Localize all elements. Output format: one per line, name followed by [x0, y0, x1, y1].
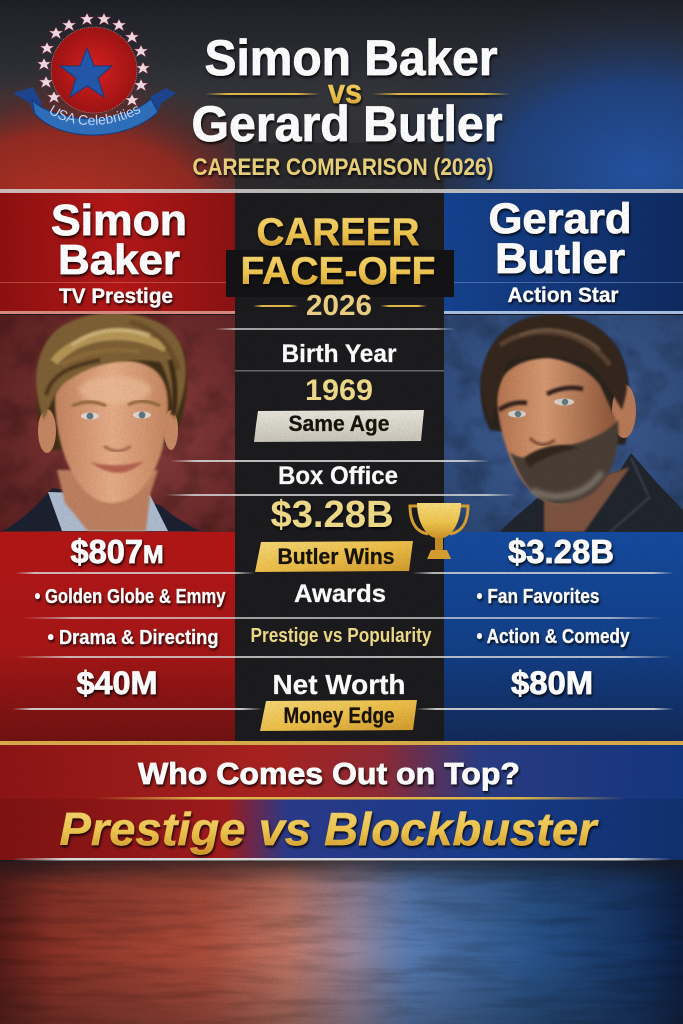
nose	[104, 446, 131, 451]
panel: Gerard Butler stats	[444, 532, 683, 741]
title line: Gerard Butler: Gerard Butler	[192, 96, 502, 152]
panel: Simon Baker portrait	[0, 313, 235, 532]
stat: specialty: • Drama & Directing	[48, 627, 218, 649]
tag: money edge: Money Edge	[284, 703, 394, 728]
center heading: CAREER	[256, 211, 420, 254]
stat: net worth: $40M	[76, 665, 158, 701]
eyes	[81, 412, 151, 420]
name: Simon Baker: Simon	[51, 196, 187, 245]
back hair	[36, 316, 187, 450]
brows	[72, 401, 160, 406]
stat: net worth: $80M	[511, 665, 593, 701]
center heading: FACE-OFF	[240, 250, 436, 293]
face	[497, 358, 616, 504]
value: 1969: 1969	[305, 374, 373, 407]
stat: specialty: • Action & Comedy	[476, 626, 630, 648]
ear	[612, 384, 636, 438]
stat: box office: $3.28B	[508, 533, 614, 570]
neck	[544, 467, 630, 532]
neck	[57, 470, 158, 531]
logo: USA Celebrities badge	[13, 13, 176, 136]
vs divider: vs	[328, 73, 362, 111]
logo ribbon	[13, 87, 176, 135]
background: top header area	[0, 0, 683, 192]
name: Gerard Butler: Gerard	[488, 195, 632, 243]
mouth	[90, 461, 144, 473]
eyes	[508, 398, 574, 418]
hair	[482, 315, 627, 425]
panel: Simon Baker header	[0, 192, 235, 314]
logo star	[60, 48, 112, 97]
face	[55, 360, 168, 503]
center year: 2026	[306, 290, 372, 322]
subtitle: CAREER COMPARISON (2026)	[192, 154, 494, 181]
tagline: TV Prestige: TV Prestige	[59, 285, 173, 308]
name: Simon Baker: Baker	[58, 236, 180, 283]
row: net worth: Net Worth	[272, 669, 406, 700]
panel: Gerard Butler portrait	[444, 315, 683, 532]
panel: Gerard Butler header	[444, 192, 683, 314]
row: awards: Awards	[294, 580, 386, 608]
icon: gold trophy	[410, 503, 468, 559]
tag: same age: Same Age	[288, 411, 390, 436]
stat: box office: $807M	[70, 533, 164, 570]
tag: money edge	[260, 700, 417, 731]
jacket	[3, 488, 200, 531]
logo ring of stars	[37, 13, 150, 106]
verdict question: Who Comes Out on Top?	[138, 756, 520, 791]
ears	[38, 409, 178, 453]
verdict headline: Prestige vs Blockbuster	[60, 803, 599, 855]
shirt	[48, 492, 168, 531]
stat: awards: • Fan Favorites	[476, 586, 600, 608]
row: birth year: Birth Year	[282, 340, 397, 368]
stat: awards: • Golden Globe & Emmy	[34, 586, 226, 608]
hair strands	[46, 322, 178, 415]
tag: butler wins: Butler Wins	[278, 544, 394, 569]
career face-off plate	[226, 250, 454, 297]
hair	[36, 313, 186, 420]
logo text: USA Celebrities	[50, 105, 140, 126]
name: Simon Baker	[51, 196, 187, 283]
center heading	[240, 211, 436, 293]
back hair	[480, 315, 630, 445]
tag: same age	[254, 410, 424, 442]
logo disc	[51, 27, 137, 113]
title line: Simon Baker: Simon Baker	[204, 30, 498, 86]
brows	[499, 388, 583, 410]
value: $3.28B: $3.28B	[270, 494, 394, 536]
main title	[192, 30, 510, 181]
text: prestige vs popularity: Prestige vs Popularity	[250, 625, 432, 647]
background: bottom floor	[0, 861, 683, 1024]
beard	[510, 420, 618, 504]
forehead highlight	[79, 376, 151, 404]
nose	[530, 438, 555, 445]
name: Gerard Butler	[488, 195, 632, 283]
panel: center comparison column	[226, 192, 468, 741]
row: box office: Box Office	[278, 462, 398, 490]
hair strands	[500, 330, 610, 365]
moustache	[524, 445, 578, 468]
panel: bottom verdict band	[0, 741, 683, 860]
tagline: Action Star: Action Star	[508, 284, 618, 307]
jacket	[500, 453, 683, 532]
name: Gerard Butler: Butler	[495, 235, 625, 283]
panel: Simon Baker stats	[0, 532, 235, 741]
tag: butler wins	[255, 541, 413, 572]
